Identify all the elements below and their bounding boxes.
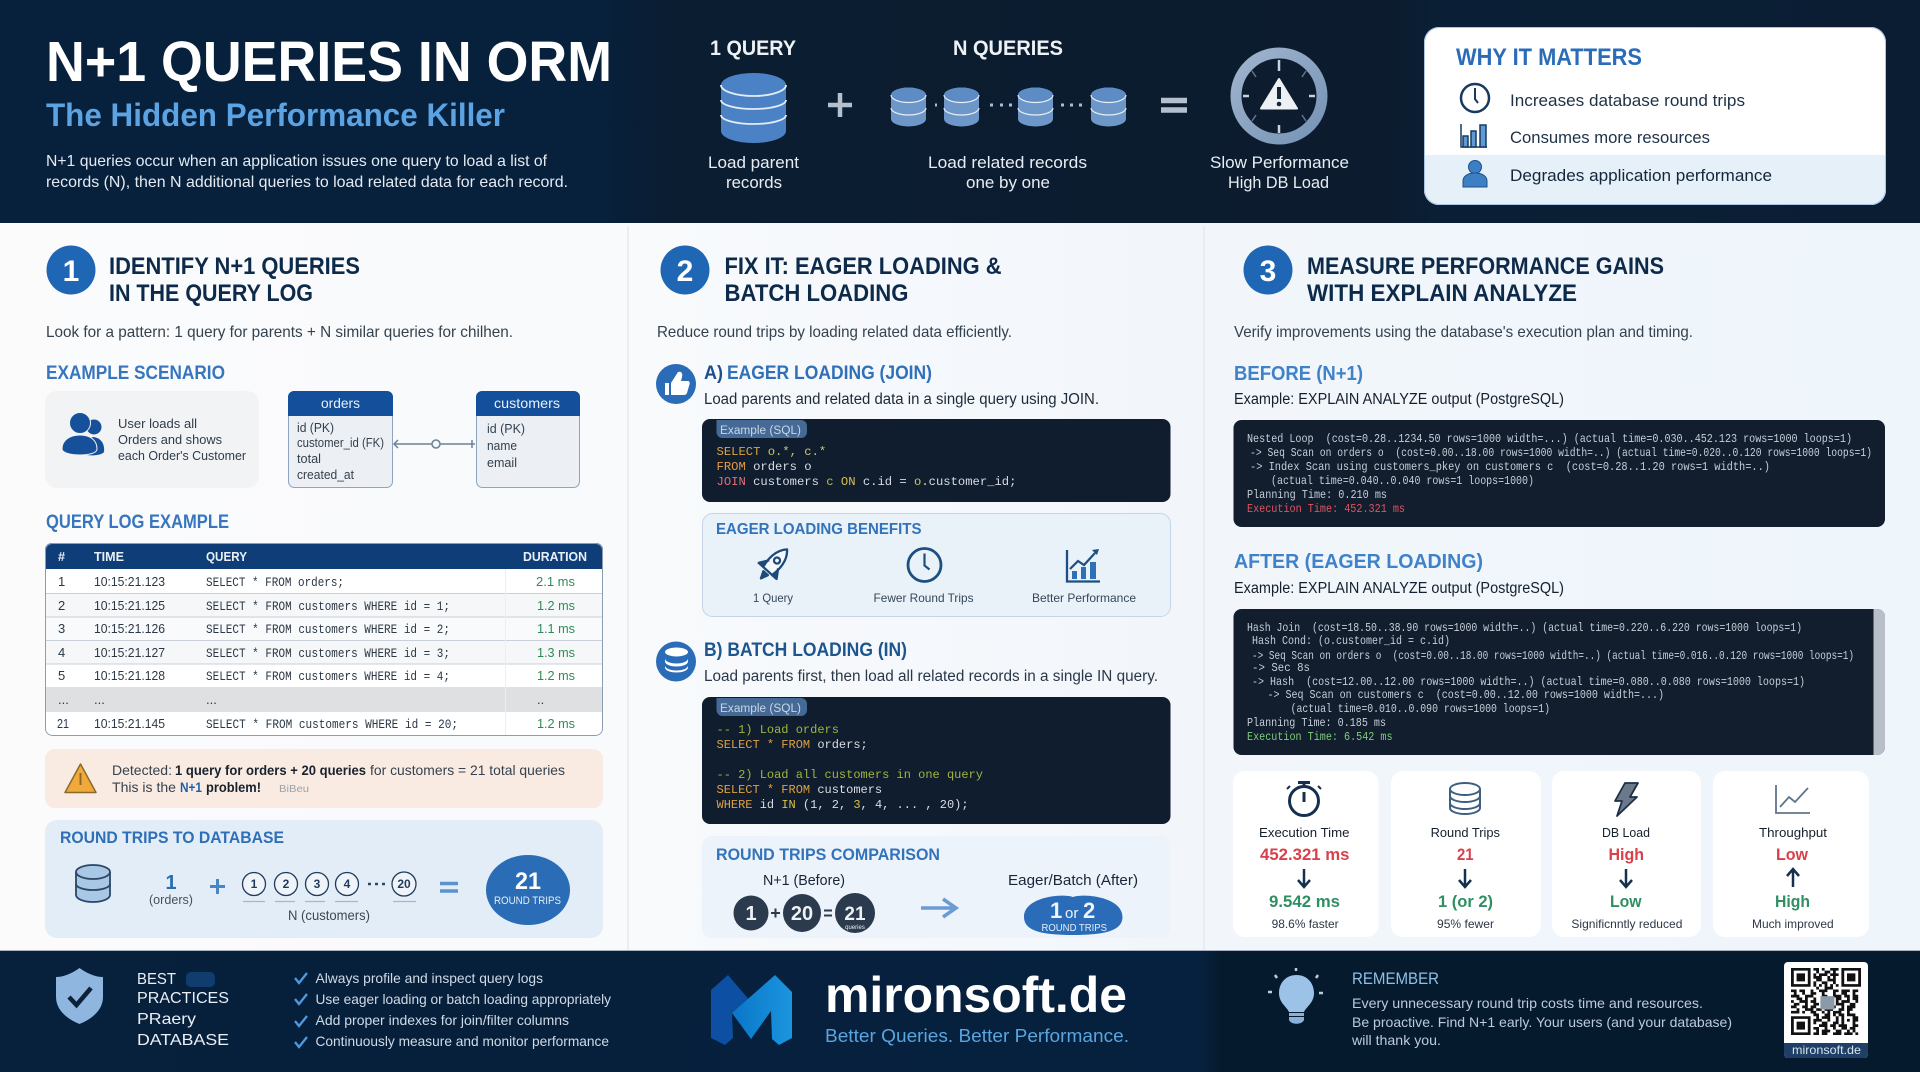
panel: section 1 identify xyxy=(45,246,603,938)
code block: join example: FROM orders o xyxy=(716,460,812,474)
panel: section 3 measure xyxy=(1233,246,1885,937)
load related caption: Load related records xyxy=(928,153,1087,172)
panel: round trips to database: ROUND TRIPS TO DATABASE xyxy=(60,828,284,847)
subheading: example scenario: EXAMPLE SCENARIO xyxy=(46,363,225,384)
metric card: execution time: 452.321 ms xyxy=(1260,846,1350,864)
eager loading description: Load parents and related data in a single query using JOIN. xyxy=(704,391,1099,408)
arrow down xyxy=(1620,869,1632,887)
icon: shield xyxy=(56,968,103,1024)
metric card: db load: DB Load xyxy=(1602,825,1650,840)
table rows: ... xyxy=(94,692,105,707)
best practices label: PRaery xyxy=(137,1011,196,1028)
intro text: records (N), then N additional queries to load related data for each record. xyxy=(46,174,568,191)
table: orders: id (PK) xyxy=(297,420,334,435)
table rows: 10:15:21.145 xyxy=(94,716,165,731)
table rows: SELECT * FROM customers WHERE id = 3; xyxy=(206,646,450,661)
icon: warning gauge xyxy=(1236,53,1322,139)
icon: person xyxy=(1463,160,1487,187)
metric card: db load: Significnntly reduced xyxy=(1571,917,1682,931)
table rows: 1.2 ms xyxy=(537,716,575,731)
plus sign xyxy=(828,93,852,117)
metric card: execution time: 9.542 ms xyxy=(1269,892,1340,911)
table: customers: name xyxy=(487,438,517,453)
footer band xyxy=(0,950,1920,1072)
best practices label: PRACTICES xyxy=(137,990,229,1007)
number badge 3: 3 xyxy=(1260,255,1276,288)
load related caption xyxy=(928,153,1087,192)
arrow down xyxy=(1298,869,1310,887)
panel: round trips to database xyxy=(45,820,603,938)
section heading: IDENTIFY N+1 QUERIES xyxy=(109,253,360,280)
before equation xyxy=(734,893,875,933)
equals sign xyxy=(440,884,458,891)
table rows: SELECT * FROM customers WHERE id = 2; xyxy=(206,622,450,637)
icon: clock xyxy=(908,548,941,582)
remember text: Every unnecessary round trip costs time and resources. xyxy=(1352,995,1703,1011)
table: customers: email xyxy=(487,455,517,470)
section heading xyxy=(724,253,1002,307)
callout text: BiBeu xyxy=(279,784,309,795)
icon: large database xyxy=(721,73,786,143)
table rows xyxy=(57,574,575,732)
brand name: mironsoft.de xyxy=(825,967,1127,1023)
n customer query circles: 20 xyxy=(397,877,411,891)
code block: before plan xyxy=(1234,420,1885,527)
section heading: BATCH LOADING xyxy=(724,280,908,307)
icon: growth chart xyxy=(1067,549,1100,582)
icon: line chart xyxy=(1776,785,1810,813)
before description: Example: EXPLAIN ANALYZE output (PostgreSQL) xyxy=(1234,391,1564,408)
callout text: problem! xyxy=(206,779,261,795)
number badge 1 xyxy=(46,246,96,294)
slow performance caption: High DB Load xyxy=(1228,173,1329,192)
slow performance caption: Slow Performance xyxy=(1210,153,1349,172)
panel: eager loading benefits xyxy=(702,514,1170,616)
code block: after plan: -> Hash (cost=12.00..12.00 rows=1000 width=..) (actual time=0.080..0.080 rows=1000 loops=1) xyxy=(1252,675,1805,689)
scenario text xyxy=(118,416,247,463)
callout: detected problem xyxy=(45,749,603,808)
section intro: Reduce round trips by loading related data efficiently. xyxy=(657,324,1012,341)
before equation: 1 xyxy=(745,903,757,925)
arrow down xyxy=(1459,869,1471,887)
code block: before plan: -> Index Scan using customers_pkey on customers c (cost=0.28..1.20 rows=1 width=..) xyxy=(1250,460,1770,474)
scenario text: each Order's Customer xyxy=(118,448,247,463)
panel: why it matters xyxy=(1424,27,1886,205)
best practices checklist: Use eager loading or batch loading appropriately xyxy=(316,991,611,1007)
section heading: IN THE QUERY LOG xyxy=(109,280,313,307)
subheading: query log example: QUERY LOG EXAMPLE xyxy=(46,512,229,533)
code block: join example: JOIN customers c ON c.id = o.customer_id; xyxy=(716,475,1016,489)
table rows: 1.2 ms xyxy=(537,598,575,613)
table rows: 1.2 ms xyxy=(537,668,575,683)
table rows: 10:15:21.128 xyxy=(94,668,165,683)
icon: light bulb xyxy=(1268,968,1323,1024)
table rows: 2 xyxy=(58,598,65,613)
table rows: 1.3 ms xyxy=(537,645,575,660)
1 query label: 1 QUERY xyxy=(710,37,796,60)
number badge 2 xyxy=(660,246,710,294)
panel: round trips comparison: ROUND TRIPS COMPARISON xyxy=(716,846,940,864)
item text: Increases database round trips xyxy=(1510,91,1745,110)
table rows: .. xyxy=(537,692,544,707)
callout text: This is the xyxy=(112,779,176,795)
icon: bars xyxy=(1461,124,1487,147)
subheading: eager loading: EAGER LOADING (JOIN) xyxy=(727,363,932,384)
metric card: db load xyxy=(1552,771,1701,937)
n customer query circles: N (customers) xyxy=(288,907,370,923)
table rows: 5 xyxy=(58,668,65,683)
remember text: Be proactive. Find N+1 early. Your users (and your database) xyxy=(1352,1014,1732,1030)
header band xyxy=(0,0,1920,223)
icon: warning triangle xyxy=(65,764,96,792)
scenario text: User loads all xyxy=(118,416,197,431)
table: orders: created_at xyxy=(297,467,354,482)
total badge xyxy=(486,855,570,925)
table rows: 10:15:21.127 xyxy=(94,645,165,660)
panel: round trips comparison: Eager/Batch (After) xyxy=(1008,873,1138,889)
code block: after plan: -> Seq Scan on customers c (cost=0.00..12.00 rows=1000 width=...) xyxy=(1268,688,1664,702)
qr code: mironsoft.de xyxy=(1792,1043,1861,1057)
table: customers xyxy=(476,391,580,488)
panel: eager loading benefits: EAGER LOADING BENEFITS xyxy=(716,521,922,538)
code block: before plan: Execution Time: 452.321 ms xyxy=(1247,502,1405,516)
n queries label: N QUERIES xyxy=(953,37,1063,60)
metric card: execution time: 98.6% faster xyxy=(1272,917,1339,931)
table: orders: orders xyxy=(321,395,360,411)
after description: Example: EXPLAIN ANALYZE output (PostgreSQL) xyxy=(1234,580,1564,597)
item text: Consumes more resources xyxy=(1510,128,1710,147)
one orders query: 1 xyxy=(165,872,177,894)
logo mark xyxy=(711,975,792,1045)
code block: in example: SELECT * FROM orders; xyxy=(716,738,868,752)
metric card: round trips: 1 (or 2) xyxy=(1438,892,1493,911)
after badge: 2 xyxy=(1083,898,1095,923)
code block: join example xyxy=(702,419,1170,502)
intro text xyxy=(46,153,568,191)
table rows: SELECT * FROM customers WHERE id = 20; xyxy=(206,717,458,732)
callout text: N+1 xyxy=(180,779,202,795)
code block: join example: SELECT o.*, c.* xyxy=(716,445,826,459)
benefit labels: Better Performance xyxy=(1032,591,1136,605)
after badge: or xyxy=(1065,905,1078,922)
load parent caption: Load parent xyxy=(708,153,799,172)
subheading: after: AFTER (EAGER LOADING) xyxy=(1234,551,1483,573)
best practices checklist: Add proper indexes for join/filter columns xyxy=(316,1012,569,1028)
best practices checklist: Always profile and inspect query logs xyxy=(316,970,543,986)
table rows: SELECT * FROM customers WHERE id = 1; xyxy=(206,599,450,614)
subtitle: The Hidden Performance Killer xyxy=(46,97,505,133)
code block: after plan: -> Sec 8s xyxy=(1252,661,1310,675)
code block: after plan: Planning Time: 0.185 ms xyxy=(1247,716,1386,730)
section heading xyxy=(1307,253,1664,307)
n customer query circles: 3 xyxy=(314,877,321,891)
metric card: round trips: 95% fewer xyxy=(1437,917,1494,931)
metric card: throughput: High xyxy=(1775,892,1810,911)
table: orders xyxy=(288,391,393,488)
number badge 3 xyxy=(1244,246,1292,294)
table rows: 2.1 ms xyxy=(536,574,575,589)
scenario card xyxy=(45,391,259,488)
number badge 2: 2 xyxy=(677,255,693,288)
metric card: round trips: Round Trips xyxy=(1431,825,1500,840)
metric card: execution time xyxy=(1233,771,1378,937)
before equation: 21 xyxy=(844,904,866,925)
one orders query xyxy=(149,872,193,907)
section intro: Look for a pattern: 1 query for parents + N similar queries for chilhen. xyxy=(46,324,513,341)
total badge: 21 xyxy=(515,868,541,895)
code block: after plan: Hash Cond: (o.customer_id = c.id) xyxy=(1252,634,1450,648)
icon: lightning bolt xyxy=(1615,783,1638,816)
load parent caption xyxy=(708,153,799,192)
column dividers xyxy=(628,226,1204,950)
metric card: throughput: Low xyxy=(1776,846,1808,864)
table rows: 1.1 ms xyxy=(537,621,575,636)
metric card: db load: Low xyxy=(1610,892,1642,911)
icon: rocket xyxy=(752,541,796,586)
table rows: 3 xyxy=(58,621,65,636)
table header: DURATION xyxy=(523,549,587,564)
n customer query circles: 1 xyxy=(251,877,258,891)
batch loading description: Load parents first, then load all related records in a single IN query. xyxy=(704,668,1158,685)
subheading: batch loading: B) BATCH LOADING (IN) xyxy=(704,640,907,661)
icon: batch database xyxy=(656,642,696,682)
panel: round trips comparison: N+1 (Before) xyxy=(763,873,845,889)
panel: section 2 fix it xyxy=(656,246,1170,938)
slow performance caption xyxy=(1210,153,1349,192)
table rows: SELECT * FROM customers WHERE id = 4; xyxy=(206,669,450,684)
table rows: 10:15:21.123 xyxy=(94,574,165,589)
metric card: throughput xyxy=(1713,771,1869,937)
table: customers: customers xyxy=(494,395,560,411)
intro text: N+1 queries occur when an application issues one query to load a list of xyxy=(46,153,548,170)
section heading xyxy=(109,253,360,307)
section heading: MEASURE PERFORMANCE GAINS xyxy=(1307,253,1664,280)
table rows: ... xyxy=(206,692,217,707)
brand tagline: Better Queries. Better Performance. xyxy=(825,1026,1129,1046)
best practices label xyxy=(137,971,229,1049)
callout text: Detected: xyxy=(112,762,172,778)
best practices label: DATABASE xyxy=(137,1032,229,1049)
before equation: 20 xyxy=(791,903,813,925)
code block: in example xyxy=(702,697,1170,824)
total badge: ROUND TRIPS xyxy=(494,895,561,907)
arrow xyxy=(921,899,956,917)
icon: database xyxy=(1450,783,1480,814)
panel: round trips comparison xyxy=(702,836,1170,938)
section intro: Verify improvements using the database's execution plan and timing. xyxy=(1234,324,1693,341)
code block: in example: WHERE id IN (1, 2, 3, 4, ... , 20); xyxy=(716,798,969,812)
load parent caption: records xyxy=(726,173,782,192)
code block: in example: SELECT * FROM customers xyxy=(716,783,882,797)
query log table xyxy=(45,543,603,736)
plus sign xyxy=(210,879,225,894)
best practices checklist xyxy=(295,970,611,1049)
code block: join example: Example (SQL) xyxy=(720,425,801,437)
table: customers: id (PK) xyxy=(487,421,525,436)
icon: row of small databases xyxy=(891,88,1126,126)
table rows: SELECT * FROM orders; xyxy=(206,575,344,590)
equals sign xyxy=(1161,100,1187,110)
before equation: queries xyxy=(845,925,865,931)
table rows: 1 xyxy=(58,574,65,589)
icon: clock xyxy=(1461,84,1489,112)
subheading: before: BEFORE (N+1) xyxy=(1234,363,1363,385)
callout text: for customers = 21 total queries xyxy=(370,762,565,778)
metric card: db load: High xyxy=(1608,846,1644,864)
heading: WHY IT MATTERS xyxy=(1456,44,1642,71)
table header: QUERY xyxy=(206,549,247,564)
title: N+1 QUERIES IN ORM xyxy=(46,30,612,94)
after badge: 1 xyxy=(1050,898,1062,923)
relationship connector xyxy=(394,440,475,448)
load related caption: one by one xyxy=(966,173,1050,192)
best practices checklist: Continuously measure and monitor performance xyxy=(316,1033,609,1049)
table header xyxy=(58,549,587,564)
best practices label: BEST xyxy=(137,971,176,988)
n customer query circles: 2 xyxy=(283,877,290,891)
table rows: 21 xyxy=(57,716,69,731)
table: orders: total xyxy=(297,451,321,466)
code block: before plan: Planning Time: 0.210 ms xyxy=(1247,488,1387,502)
arrow up xyxy=(1787,869,1799,887)
remember text: will thank you. xyxy=(1351,1032,1441,1048)
n customer query circles: 4 xyxy=(344,877,351,891)
icon: database xyxy=(76,865,110,902)
after badge xyxy=(1024,896,1122,935)
callout text xyxy=(112,762,565,795)
benefit labels: Fewer Round Trips xyxy=(874,591,974,605)
code block: in example: -- 1) Load orders xyxy=(716,723,839,737)
table header: TIME xyxy=(94,549,124,564)
remember heading: REMEMBER xyxy=(1352,970,1439,988)
table rows: 10:15:21.126 xyxy=(94,621,165,636)
n customer query circles xyxy=(242,872,416,923)
one orders query: (orders) xyxy=(149,892,193,907)
table rows: ... xyxy=(58,692,69,707)
number badge 1: 1 xyxy=(63,255,79,288)
remember text xyxy=(1351,995,1732,1048)
code block: in example: -- 2) Load all customers in one query xyxy=(716,768,983,782)
after badge: ROUND TRIPS xyxy=(1042,922,1107,934)
code block: after plan: Hash Join (cost=18.50..38.90 rows=1000 width=..) (actual time=0.220..6.220 rows=1000 loops=1) xyxy=(1247,621,1802,635)
benefit labels xyxy=(753,591,1136,605)
metric card: throughput: Much improved xyxy=(1752,917,1834,931)
item text: Degrades application performance xyxy=(1510,166,1772,185)
code block: before plan: (actual time=0.040..0.040 rows=1 loops=1000) xyxy=(1271,474,1534,488)
code block: after plan: Execution Time: 6.542 ms xyxy=(1247,730,1392,744)
table rows: 4 xyxy=(58,645,65,660)
icon: stopwatch xyxy=(1287,782,1321,816)
scenario text: Orders and shows xyxy=(118,432,222,447)
section heading: WITH EXPLAIN ANALYZE xyxy=(1307,280,1577,307)
icon: users xyxy=(62,412,104,455)
code block: after plan: (actual time=0.010..0.090 rows=1000 loops=1) xyxy=(1291,702,1550,716)
table rows: 10:15:21.125 xyxy=(94,598,165,613)
subheading: eager loading: A) xyxy=(704,363,723,384)
callout text: 1 query for orders + 20 queries xyxy=(175,762,366,778)
metric card: round trips xyxy=(1391,771,1541,937)
qr code xyxy=(1784,962,1868,1058)
metric card: execution time: Execution Time xyxy=(1259,825,1350,840)
code block: in example: Example (SQL) xyxy=(720,703,801,715)
section heading: FIX IT: EAGER LOADING & xyxy=(724,253,1002,280)
metric card: throughput: Throughput xyxy=(1759,825,1827,840)
table: orders: customer_id (FK) xyxy=(297,435,384,450)
table header: # xyxy=(58,549,66,564)
icon: thumbs up xyxy=(656,364,696,404)
code block: after plan xyxy=(1234,609,1885,755)
benefit labels: 1 Query xyxy=(753,591,793,605)
metric card: round trips: 21 xyxy=(1457,846,1474,864)
